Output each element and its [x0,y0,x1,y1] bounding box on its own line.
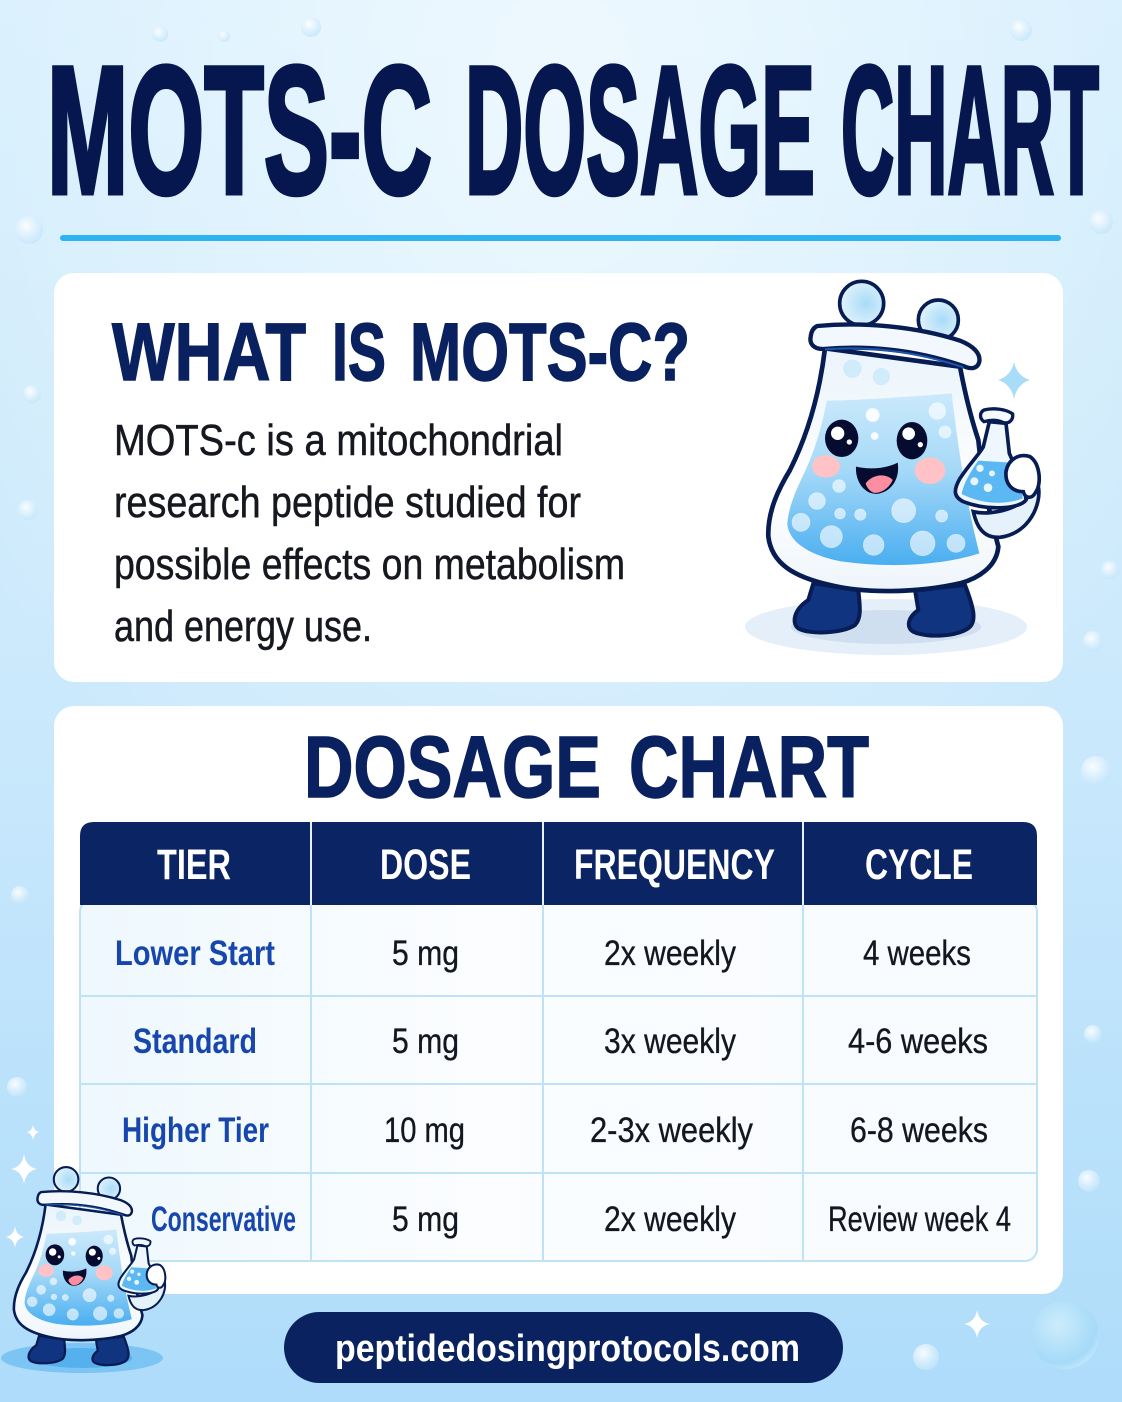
description text: MOTS-c is a mitochondrial [114,416,563,465]
table header: DOSE [380,841,471,889]
table values [384,934,1011,1239]
title [47,28,1099,232]
mascot: flask character [745,281,1039,655]
title: MOTS-C [47,28,432,232]
panel: what is MOTS-c [54,273,1063,682]
description text: research peptide studied for [114,478,581,527]
heading: dosage chart: CHART [629,719,869,816]
heading: dosage chart [304,719,869,816]
tier labels: Conservative [151,1200,296,1239]
table values: 5 mg [392,1200,459,1239]
table header: CYCLE [865,841,973,889]
table values: 3x weekly [604,1022,736,1061]
description text: and energy use. [114,602,372,651]
table values: Review week 4 [828,1200,1011,1239]
description text: possible effects on metabolism [114,540,625,589]
title divider [60,235,1061,241]
decorative large bubble [1031,1301,1099,1369]
mascot: small flask character [1,1167,165,1373]
dosage table [80,822,1037,1261]
sparkles [6,1125,990,1338]
heading: what is MOTS-c: WHAT [112,307,306,398]
footer website pill [284,1312,843,1383]
table values: 2x weekly [604,1200,736,1239]
tier labels: Higher Tier [122,1111,269,1150]
table values: 5 mg [392,934,459,973]
table values: 6-8 weeks [850,1111,988,1150]
table header: TIER [157,841,231,889]
tier labels: Standard [133,1022,257,1061]
panel: dosage chart [54,706,1063,1294]
heading: what is MOTS-c: IS [332,307,386,398]
table values: 2x weekly [604,934,736,973]
table values: 4-6 weeks [848,1022,988,1061]
table values: 5 mg [392,1022,459,1061]
tier labels [115,934,296,1239]
table header [80,822,1037,905]
footer website pill: peptidedosingprotocols.com [335,1328,800,1370]
heading: what is MOTS-c [112,307,690,398]
table header: FREQUENCY [574,841,775,889]
table values: 2-3x weekly [590,1111,753,1150]
heading: what is MOTS-c: MOTS-C? [410,307,690,398]
table values: 4 weeks [863,934,971,973]
table values: 10 mg [384,1111,465,1150]
tier labels: Lower Start [115,934,275,973]
description text [114,416,625,651]
heading: dosage chart: DOSAGE [304,719,601,816]
